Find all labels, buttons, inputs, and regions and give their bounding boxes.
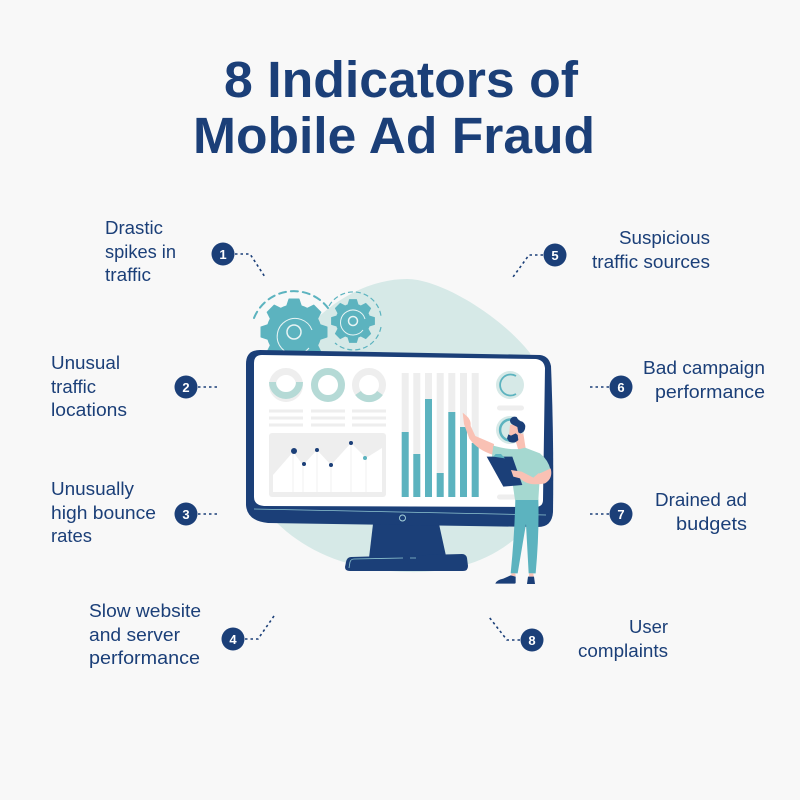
monitor base <box>345 554 468 571</box>
callout 7 <box>588 490 747 534</box>
callout 4: and server <box>89 625 180 645</box>
callout 1 <box>105 218 265 285</box>
callout 8: User <box>629 617 668 637</box>
callout 5 <box>513 228 710 277</box>
area chart <box>269 433 386 497</box>
callout 4: performance <box>89 648 200 668</box>
callout 5: traffic sources <box>592 252 710 272</box>
callout 6: Bad campaign <box>643 358 765 378</box>
callout 8 <box>489 617 668 661</box>
callout 6 <box>588 358 765 402</box>
callout 8: 8 <box>528 633 536 648</box>
title <box>193 51 595 164</box>
callout 1: traffic <box>105 265 151 285</box>
callout 1: Drastic <box>105 218 163 238</box>
callout 6: 6 <box>617 380 625 395</box>
callout 5: 5 <box>551 248 559 263</box>
monitor stand <box>369 524 446 558</box>
callout 2 <box>51 353 218 420</box>
callout 1: 1 <box>219 247 227 262</box>
callout 3: 3 <box>182 507 190 522</box>
person pointing at the screen <box>463 413 551 584</box>
bar chart <box>402 373 479 497</box>
callout 3: rates <box>51 526 92 546</box>
callout 6: performance <box>655 382 765 402</box>
text placeholder lines <box>269 410 386 426</box>
icon: small gear <box>329 292 381 350</box>
illustration background blob <box>271 279 540 572</box>
callout 2: 2 <box>182 380 190 395</box>
callout 5: Suspicious <box>619 228 710 248</box>
title: 8 Indicators of <box>224 51 579 108</box>
callout 4: Slow website <box>89 601 201 621</box>
callout 7: budgets <box>676 514 747 534</box>
callout 3 <box>51 479 218 546</box>
callout 4: 4 <box>229 632 237 647</box>
title: Mobile Ad Fraud <box>193 107 595 164</box>
callout 7: Drained ad <box>655 490 747 510</box>
donut charts <box>272 372 382 399</box>
monitor <box>246 350 553 527</box>
callout 2: locations <box>51 400 127 420</box>
callout 7: 7 <box>617 507 625 522</box>
callout 3: high bounce <box>51 503 156 523</box>
callout 2: Unusual <box>51 353 120 373</box>
callout 2: traffic <box>51 377 96 397</box>
gauge widgets <box>496 371 524 500</box>
callout 3: Unusually <box>51 479 134 499</box>
icon: large gear <box>254 291 328 365</box>
callout 1: spikes in <box>105 242 176 262</box>
callout 8: complaints <box>578 641 668 661</box>
callout 4 <box>89 601 274 668</box>
